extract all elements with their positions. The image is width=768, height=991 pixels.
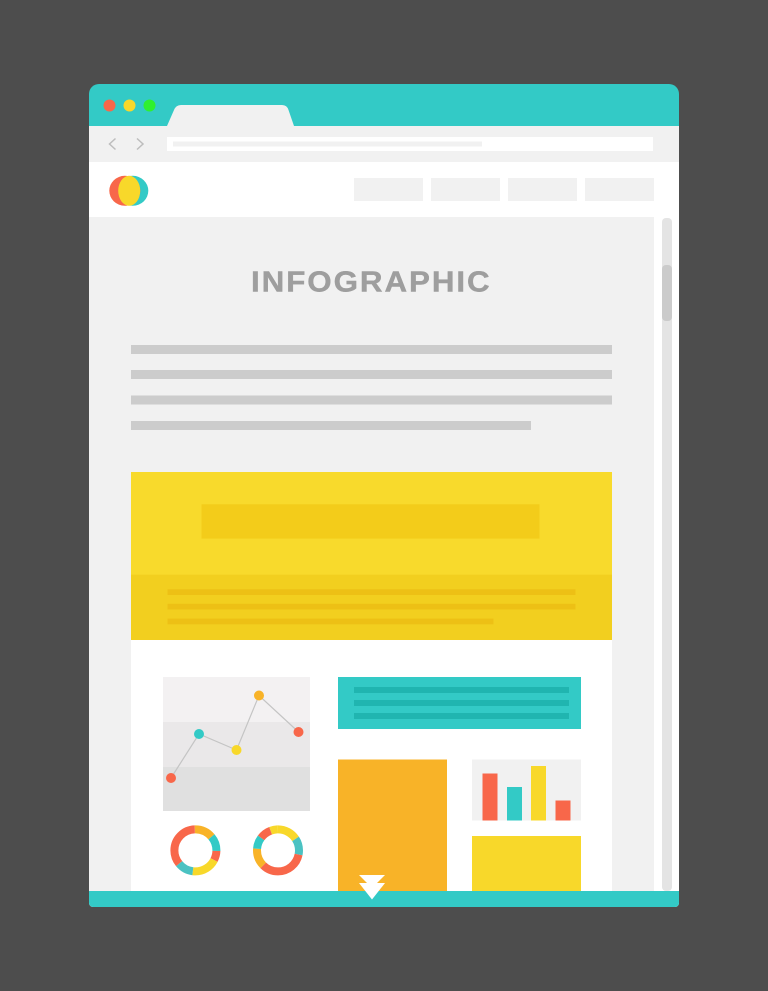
intro text placeholder [131, 345, 612, 430]
title bar [89, 84, 679, 126]
nav item 2 [431, 178, 500, 201]
nav item 1 [354, 178, 423, 201]
window control: maximize [144, 100, 156, 112]
infographic card [131, 472, 612, 892]
scrollbar thumb [662, 265, 672, 321]
donut chart left [174, 829, 216, 871]
browser tab [167, 105, 294, 126]
nav item 4 [585, 178, 654, 201]
window control: close [104, 100, 116, 112]
logo [109, 176, 148, 206]
icon: back arrow [110, 138, 116, 150]
banner heading placeholder [202, 504, 540, 539]
line chart [163, 677, 310, 811]
banner text placeholder [168, 589, 576, 624]
window control: minimize [124, 100, 136, 112]
icon: scroll down arrow [359, 875, 385, 900]
browser window [89, 84, 679, 907]
teal text block [338, 677, 581, 729]
yellow block [472, 836, 581, 891]
nav item 3 [508, 178, 577, 201]
orange block [338, 760, 447, 892]
toolbar [89, 126, 679, 162]
scrollbar track [662, 218, 672, 891]
site header [109, 176, 654, 206]
bottom bar [89, 891, 679, 907]
yellow banner [131, 472, 612, 575]
donut chart right [257, 829, 299, 871]
address text placeholder [173, 142, 482, 146]
card body [131, 640, 612, 891]
window frame [89, 120, 679, 907]
icon: forward arrow [137, 138, 143, 150]
banner lower band [131, 575, 612, 640]
title: INFOGRAPHIC [251, 267, 492, 298]
address bar [167, 137, 653, 151]
page content panel [89, 217, 654, 891]
bar chart [472, 760, 581, 820]
